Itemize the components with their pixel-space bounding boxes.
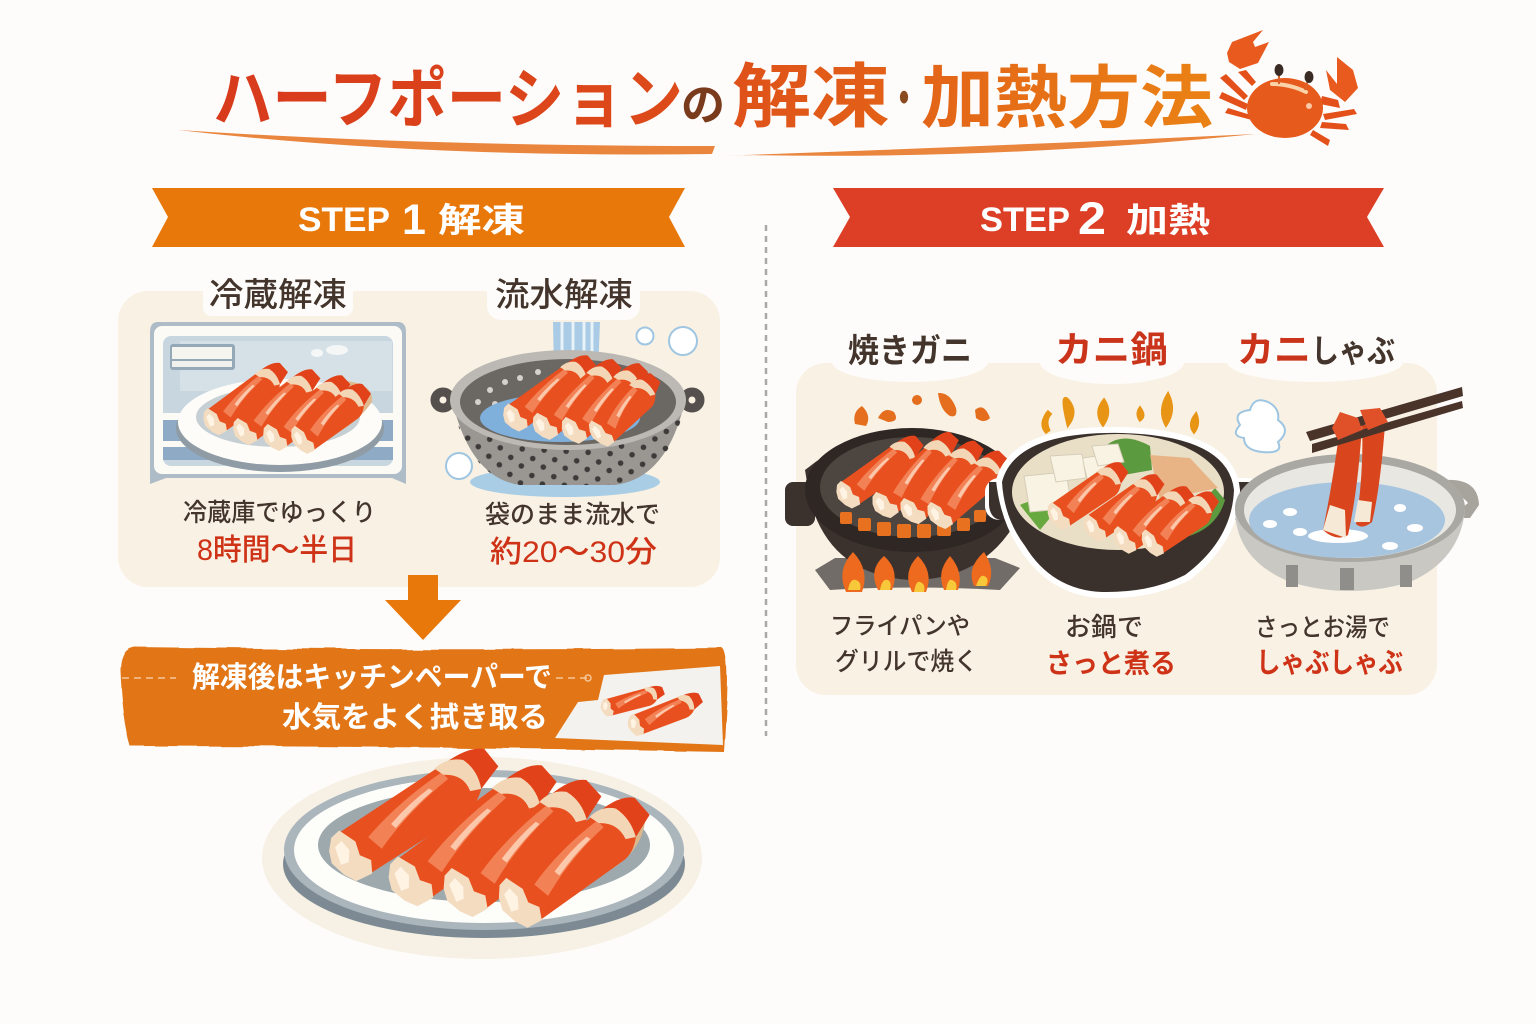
title: 解凍: [732, 58, 890, 136]
label: grilled crab: 焼きガニ: [848, 332, 972, 369]
step 1 ribbon: [152, 188, 685, 247]
icon: crab: [1219, 30, 1358, 146]
title: ハーフポーション: [213, 62, 683, 136]
text: refrigerator thaw description: 冷蔵庫でゆっくり: [183, 499, 376, 527]
illustration: grilled crab pan: [785, 393, 1032, 592]
text: hot pot description: お鍋で: [1065, 612, 1143, 642]
illustration: finished crab plate: [262, 739, 702, 959]
label: crab shabu: しゃぶ: [1311, 333, 1395, 369]
label: refrigerator thaw: 冷蔵解凍: [209, 276, 347, 313]
label: running water thaw: 流水解凍: [495, 276, 633, 313]
text: refrigerator thaw description: [183, 499, 376, 567]
illustration: crab hot pot: [985, 394, 1262, 598]
label: crab hot pot: カニ鍋: [1055, 329, 1168, 370]
text: grilled crab description: フライパンや: [830, 613, 970, 640]
illustration: refrigerator with crab on plate: [150, 322, 406, 484]
illustration: crab on kitchen paper: [555, 666, 723, 745]
label: crab shabu: [1237, 329, 1395, 370]
text: running water description: 袋のまま流水で: [485, 501, 660, 529]
step 2 ribbon: [833, 188, 1384, 247]
text: hot pot description: [1046, 612, 1176, 679]
banner: after thawing: 水気をよく拭き取る: [282, 701, 548, 734]
text: shabu description: しゃぶしゃぶ: [1256, 647, 1403, 678]
step 2 ribbon: STEP: [980, 201, 1070, 239]
arrow: down: [385, 575, 461, 640]
banner: after thawing: [120, 647, 727, 752]
text: running water description: 約20〜30分: [490, 536, 657, 569]
title: の: [681, 81, 725, 130]
text: refrigerator thaw description: 8時間〜半日: [197, 534, 357, 567]
title: [213, 58, 1213, 137]
step 2 ribbon: 加熱: [1126, 202, 1210, 240]
panel: step 2 heating methods: [785, 329, 1479, 695]
text: running water description: [485, 501, 660, 569]
step 1 ribbon: STEP: [298, 201, 390, 239]
label: running water thaw: [487, 274, 640, 320]
text: shabu description: さっとお湯で: [1255, 614, 1390, 642]
text: shabu description: [1255, 614, 1403, 678]
title underline brush: [178, 130, 1256, 156]
text: grilled crab description: [830, 613, 978, 676]
label: crab shabu: カニ: [1237, 329, 1311, 370]
text: hot pot description: さっと煮る: [1046, 649, 1176, 679]
step 2 ribbon: 2: [1078, 193, 1106, 244]
step 1 ribbon: 解凍: [438, 202, 525, 240]
panel: step 1 thawing methods: [118, 274, 720, 587]
illustration: strainer under running water: [435, 322, 700, 497]
title: ・: [888, 71, 920, 127]
illustration: crab shabu-shabu pot: [1235, 387, 1479, 591]
banner: after thawing: 解凍後はキッチンペーパーで: [192, 661, 552, 694]
text: grilled crab description: グリルで焼く: [835, 648, 978, 676]
title: 加熱方法: [921, 61, 1213, 137]
step 1 ribbon: 1: [402, 196, 426, 244]
